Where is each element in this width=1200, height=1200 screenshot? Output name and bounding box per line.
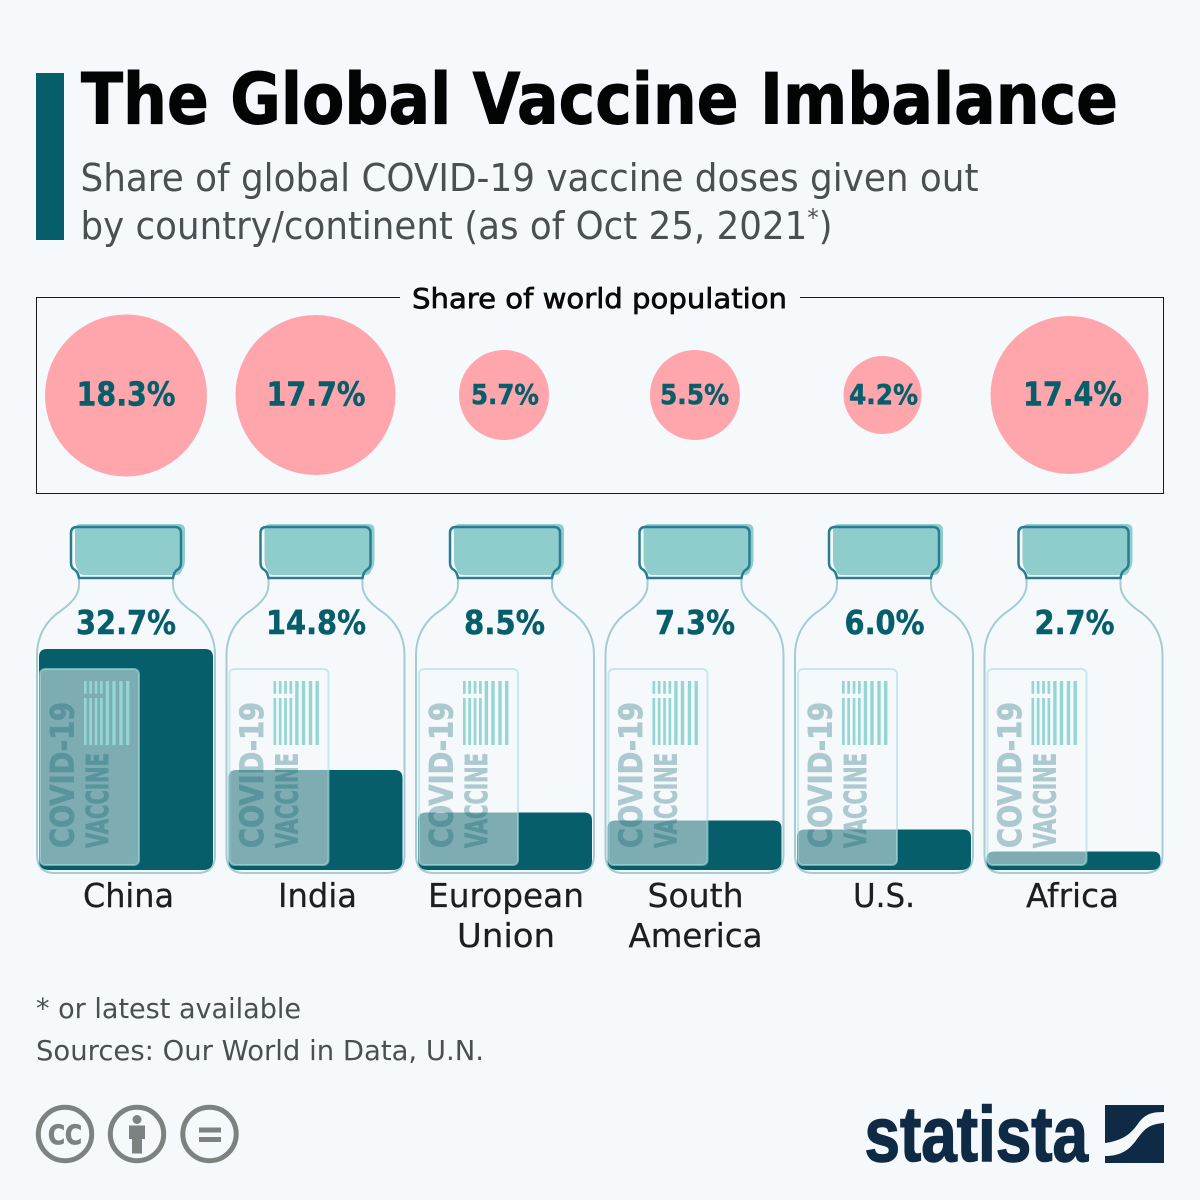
bubble: U.S.	[844, 356, 922, 434]
bubble: European Union: 5.7%	[471, 378, 539, 411]
bottle: China	[37, 524, 215, 915]
bubble: China	[45, 314, 207, 476]
subtitle: *	[807, 204, 819, 232]
vaccine label: COVID-19	[991, 702, 1029, 848]
value: 8.5%	[464, 603, 545, 642]
bottle: U.S.	[795, 524, 973, 915]
subtitle: by country/continent (as of Oct 25, 2021	[80, 204, 855, 248]
vaccine label: COVID-19	[233, 702, 271, 848]
vaccine label: VACCINE	[1028, 753, 1064, 848]
footnote: * or latest available	[36, 992, 301, 1025]
bubble: China: 18.3%	[76, 374, 176, 414]
panel: share of world population	[36, 282, 1164, 494]
vaccine label: VACCINE	[650, 753, 684, 848]
bubble: U.S.: 4.2%	[849, 378, 918, 411]
accent bar	[36, 73, 64, 240]
name: South	[648, 876, 744, 915]
bubble: India	[236, 315, 396, 475]
bubble: India: 17.7%	[266, 374, 366, 414]
icon: no derivatives	[183, 1107, 236, 1161]
statista logo: statista	[864, 1090, 1088, 1178]
vaccine label: COVID-19	[612, 702, 650, 848]
subtitle	[80, 156, 978, 248]
subtitle: Share of global COVID-19 vaccine doses given out	[80, 156, 978, 200]
vaccine label	[608, 669, 708, 865]
bubble: South America	[650, 350, 740, 440]
vaccine label	[40, 669, 139, 865]
vaccine label: VACCINE	[81, 753, 116, 848]
value: 32.7%	[76, 603, 176, 642]
icon: creative commons	[38, 1107, 92, 1161]
bottle: Africa	[984, 524, 1162, 915]
fill level	[228, 770, 402, 870]
value: 2.7%	[1034, 603, 1114, 642]
bottle: India	[226, 524, 404, 915]
vaccine label	[230, 669, 328, 865]
name: Union	[457, 916, 555, 955]
vaccine label	[988, 669, 1086, 865]
vaccine label: COVID-19	[44, 702, 82, 848]
name: European	[428, 876, 584, 915]
vaccine label: VACCINE	[839, 753, 874, 848]
bubble: European Union	[459, 350, 549, 440]
fill level	[608, 820, 782, 870]
name	[628, 876, 762, 955]
fill level	[986, 852, 1160, 870]
value: 14.8%	[266, 603, 366, 642]
bottle: South America	[606, 524, 784, 955]
icon: statista mark	[1105, 1105, 1164, 1163]
value: 6.0%	[844, 603, 924, 642]
subtitle: )	[819, 204, 832, 248]
fill level	[797, 830, 971, 870]
vaccine label: VACCINE	[270, 753, 306, 848]
vaccine label: COVID-19	[422, 702, 460, 848]
name: India	[278, 876, 357, 915]
vaccine label	[419, 669, 518, 865]
bottle: European Union	[416, 524, 594, 955]
bubble: South America: 5.5%	[660, 378, 729, 411]
fill level	[418, 812, 592, 870]
name: America	[628, 916, 762, 955]
vaccine label	[798, 669, 897, 865]
name: Africa	[1026, 876, 1119, 915]
bubble: Africa: 17.4%	[1023, 374, 1122, 414]
panel heading: Share of world population	[412, 282, 787, 315]
fill level	[39, 649, 213, 870]
name: China	[83, 876, 174, 915]
icon: creative commons: CC	[48, 1120, 82, 1151]
value: 7.3%	[655, 603, 735, 642]
name: U.S.	[853, 876, 915, 915]
bubble: Africa	[990, 316, 1148, 474]
vaccine label: COVID-19	[802, 702, 840, 848]
vaccine label: VACCINE	[460, 753, 495, 848]
icon: attribution	[110, 1107, 164, 1161]
name	[428, 876, 584, 955]
sources: Sources: Our World in Data, U.N.	[36, 1034, 484, 1067]
